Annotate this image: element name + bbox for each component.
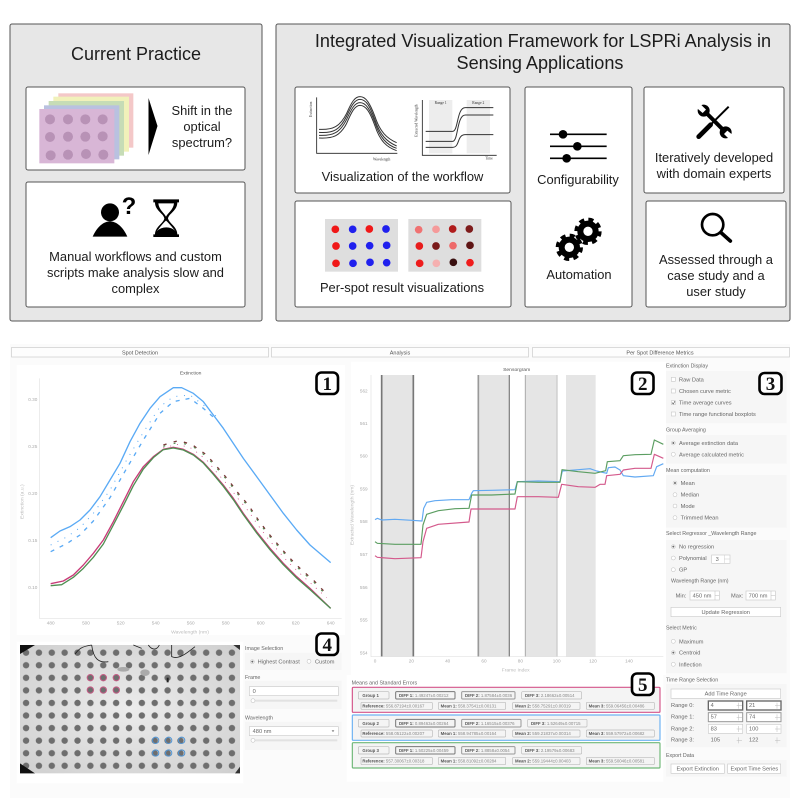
controls: regression range, metric, time ranges, export: 4 [711, 703, 714, 709]
controls: regression range, metric, time ranges, export: 105 [711, 738, 720, 744]
text: iteratively developed: with domain experts [656, 166, 771, 181]
controls: regression range, metric, time ranges, export: 700 nm [749, 593, 768, 599]
controls: image selection: 0 [253, 689, 256, 695]
text: shift question: Shift in the [172, 103, 232, 118]
controls: display options: Average calculated metric [679, 452, 744, 458]
text: iteratively developed: Iteratively developed [655, 150, 773, 165]
chart: sensorgram: 80 [518, 659, 523, 664]
chart: extinction curves: 0.25 [28, 444, 38, 449]
controls: display options: Raw Data [679, 378, 705, 384]
controls: image selection: Custom [315, 659, 335, 665]
group 1: DIFF 3: 2.18662±0.00514 [525, 693, 575, 698]
chart: sensorgram sketch: Time [485, 156, 493, 160]
group 1: DIFF 1: 1.49247±0.00212 [399, 693, 449, 698]
tab bar: Analysis [390, 350, 410, 356]
badge: 1 [316, 372, 338, 395]
controls: regression range, metric, time ranges, export: 100 [749, 726, 758, 732]
badge: 3: 3 [766, 374, 775, 395]
controls: display options: Select Regressor _Wavelength Range [666, 531, 756, 537]
chart: extinction curves: 0.10 [28, 585, 38, 590]
chart: sensorgram: 20 [409, 659, 414, 664]
chart: sensorgram: Sensorgram [503, 367, 530, 373]
group 1 [352, 687, 660, 712]
group 1: Mean 1: 558.37541±0.00131 [441, 703, 497, 708]
icon: hourglass [153, 199, 179, 237]
icon: stacked image sheets [39, 93, 133, 163]
controls: regression range, metric, time ranges, export: Range 2: [671, 726, 694, 732]
controls: regression range, metric, time ranges, export: 450 nm [693, 593, 712, 599]
card: assessed through studies [646, 201, 786, 307]
controls: display options: Average extinction data [679, 441, 739, 447]
controls: regression range, metric, time ranges, export: 74 [749, 715, 755, 721]
controls: regression range, metric, time ranges, export: Export Extinction [676, 767, 719, 773]
text: assessed: case study and a [667, 268, 766, 283]
chart: extinction curves: 560 [187, 620, 195, 625]
controls: regression range, metric, time ranges, export: Export Time Series [730, 767, 778, 773]
card: configurability and automation [525, 87, 632, 307]
chart: sensorgram: 555 [360, 618, 368, 623]
group 2: Reference: 558.05122±0.00207 [362, 731, 425, 736]
chart: sensorgram: 561 [360, 421, 368, 426]
icon: confused person: ? [122, 193, 136, 220]
chart: sensorgram: 60 [481, 659, 487, 664]
icon: wrench and screwdriver [696, 103, 734, 141]
controls: regression range, metric, time ranges, export: Time Range Selection [666, 678, 718, 684]
group 1: Reference: 556.87194±0.00167 [362, 703, 425, 708]
chart: sensorgram: 560 [360, 454, 368, 459]
panel: integrated visualization framework [276, 24, 790, 321]
group 1: Group 1 [362, 693, 380, 698]
controls: display options: GP [679, 568, 687, 574]
group 3: Group 3 [362, 748, 380, 753]
icon: confused person [93, 193, 136, 237]
controls: regression range, metric, time ranges, export: Export Data [666, 753, 694, 759]
controls: regression range, metric, time ranges, export: Range 3: [671, 738, 694, 744]
controls: display options: Time average curves [679, 401, 732, 407]
group 3: Mean 1: 558.81092±0.00284 [441, 759, 497, 764]
chart: extinction curves: 620 [292, 620, 300, 625]
chart: extinction sketch: Extinction [309, 102, 313, 117]
panel: current practice [10, 24, 262, 321]
chart: extinction sketch [309, 97, 397, 161]
controls: image selection: Highest Contrast [258, 659, 300, 665]
card: iteratively developed [644, 87, 784, 193]
badge: 2: 2 [638, 374, 648, 395]
chart: extinction curves: 520 [117, 620, 125, 625]
text: manual workflows: Manual workflows and custom [49, 249, 222, 264]
tab bar [12, 348, 790, 357]
chart: sensorgram sketch [415, 100, 497, 160]
controls: regression range, metric, time ranges, export: Inflection [679, 662, 702, 668]
chart: extinction curves: 540 [152, 620, 160, 625]
controls: regression range, metric, time ranges, export: Range 0: [671, 703, 694, 709]
chart: extinction curves: 0.30 [28, 397, 38, 402]
chart: extinction curves: Extinction [180, 370, 202, 376]
chart: extinction curves: 640 [327, 620, 335, 625]
controls: regression range, metric, time ranges, export: Wavelength Range (nm) [671, 579, 729, 585]
controls: image selection: 480 nm [253, 729, 272, 735]
panel: means and standard errors [347, 675, 663, 782]
controls: display options: Median [681, 493, 699, 499]
heading: current practice: Current Practice [71, 44, 201, 64]
group 2: DIFF 3: 1.52649±0.00715 [531, 721, 581, 726]
text: manual workflows: complex [112, 281, 160, 296]
text: manual workflows: scripts make analysis slow and [47, 265, 224, 280]
tab bar: Spot Detection [122, 350, 158, 356]
chart: extinction curves: 580 [222, 620, 230, 625]
text: automation: Automation [546, 267, 612, 282]
group 3: Reference: 557.30067±0.00318 [362, 759, 425, 764]
icon: gears [558, 220, 600, 259]
heading: framework title: Integrated Visualization Framework for LSPRi Analysis in [315, 31, 771, 51]
chart: extinction sketch: Wavelength [373, 157, 391, 161]
controls: display options: Time range functional boxplots [679, 412, 756, 418]
chart: sensorgram: 100 [553, 659, 561, 664]
chart: extinction curves: 0.15 [28, 538, 38, 543]
controls: regression range, metric, time ranges, export: Range 1: [671, 715, 694, 721]
chart: extinction curves: 0.20 [28, 491, 38, 496]
group 2 [352, 715, 660, 740]
badge: 4: 4 [323, 635, 333, 656]
controls: regression range, metric, time ranges, export: Add Time Range [705, 692, 747, 698]
chart: extinction curves: Wavelength (nm) [171, 629, 209, 635]
arrow: to question [148, 98, 158, 155]
controls: display options: Polynomial [679, 556, 707, 562]
chart: sensorgram: Frame Index [502, 667, 530, 673]
card: visualization of the workflow [295, 87, 510, 193]
card: optical spectrum question [26, 87, 245, 170]
chart: sensorgram sketch: Range 1 [435, 101, 447, 105]
controls: display options: Trimmed Mean [681, 516, 718, 522]
chart: difference spot map [408, 219, 481, 272]
controls: regression range, metric, time ranges, export: Select Metric [666, 625, 697, 631]
controls: display options: Mode [681, 504, 695, 510]
chart: sensorgram: 0 [374, 659, 377, 664]
chart: extinction curves [17, 365, 345, 635]
controls: image selection [245, 646, 342, 750]
controls: display options: Mean [681, 481, 695, 487]
chart: sensorgram: Extracted Wavelength (nm) [349, 485, 355, 545]
controls: regression range, metric, time ranges, export: 21 [749, 703, 755, 709]
chart: sensorgram [349, 362, 666, 675]
controls: regression range, metric, time ranges, export: 122 [749, 738, 758, 744]
chart: sensorgram: 140 [625, 659, 633, 664]
controls: display options [666, 364, 787, 637]
controls: regression range, metric, time ranges, export: Centroid [679, 651, 700, 657]
heading: framework title: Sensing Applications [457, 53, 623, 73]
group 3: Mean 2: 559.19444±0.00403 [515, 759, 571, 764]
text: visualization caption: Visualization of the workflow [322, 169, 484, 184]
card: manual workflows [26, 182, 245, 307]
chart: sensorgram sketch: Extracted Wavelength [415, 104, 419, 137]
group 3: DIFF 2: 1.8858±0.0054 [465, 748, 510, 753]
text: shift question: spectrum? [172, 135, 232, 150]
controls: regression range, metric, time ranges, export: Max: [731, 593, 744, 599]
group 2: DIFF 2: 1.16515±0.00376 [465, 721, 515, 726]
chart: extinction curves: Extinction (a.u.) [19, 484, 25, 519]
chart: sensorgram: 559 [360, 486, 368, 491]
chart: sensorgram: 557 [360, 552, 368, 557]
text: assessed: Assessed through a [659, 252, 774, 267]
group 2: Mean 3: 559.57972±0.00682 [589, 731, 645, 736]
icon: magnifier [702, 214, 730, 241]
controls: image selection: Frame [245, 675, 260, 681]
icon: sliders [550, 130, 607, 163]
controls: regression range, metric, time ranges, export: Min: [676, 593, 687, 599]
group 1: Mean 3: 559.06456±0.00486 [589, 703, 645, 708]
controls: display options: Chosen curve metric [679, 389, 731, 395]
controls: display options: Extinction Display [666, 364, 708, 370]
controls: display options: Group Averaging [666, 428, 706, 434]
badge: 4 [316, 634, 338, 656]
controls: regression range, metric, time ranges, export [666, 579, 787, 777]
text: assessed: user study [686, 284, 746, 299]
controls: image selection: Image Selection [245, 646, 283, 652]
group 2: Group 2 [362, 721, 380, 726]
chart: extinction curves: 600 [257, 620, 265, 625]
chart: sensorgram: 556 [360, 585, 368, 590]
controls: image selection: Wavelength [245, 715, 273, 721]
group 3: DIFF 1: 1.50225±0.00459 [399, 748, 449, 753]
badge: 3 [760, 373, 782, 395]
chart: sensorgram: 562 [360, 388, 368, 393]
text: configurability: Configurability [537, 172, 619, 187]
group 1: Mean 2: 558.75291±0.00319 [515, 703, 571, 708]
chart: sensorgram sketch: Range 2 [472, 101, 485, 105]
badge: 1: 1 [323, 374, 332, 395]
badge: 2 [632, 372, 654, 395]
chart: two-colour spot map [325, 219, 398, 272]
controls: regression range, metric, time ranges, export: Update Regression [701, 610, 750, 616]
card: per-spot results [295, 201, 511, 307]
panel: means and standard errors: Means and Standard Errors [352, 680, 417, 686]
controls: display options: 3 [716, 557, 719, 563]
panel: application screenshot [10, 344, 790, 798]
chart: sensorgram: 558 [360, 519, 368, 524]
text: shift question: optical [183, 119, 221, 134]
chart: extinction curves: 480 [47, 620, 55, 625]
badge: 5 [632, 674, 654, 696]
controls: display options: No regression [679, 545, 714, 551]
controls: regression range, metric, time ranges, export: 57 [711, 715, 717, 721]
group 3 [352, 743, 660, 768]
controls: regression range, metric, time ranges, export: Maximum [679, 639, 704, 645]
controls: display options: Mean computation [666, 468, 710, 474]
tab bar: Per Spot Difference Metrics [626, 350, 694, 356]
chart: extinction curves: 500 [82, 620, 90, 625]
chart: sensorgram: 120 [589, 659, 597, 664]
chart: sensorgram: 40 [445, 659, 451, 664]
image: spot array [17, 642, 243, 783]
group 2: DIFF 1: 0.89463±0.00264 [399, 721, 449, 726]
group 3: DIFF 3: 2.19579±0.00683 [525, 748, 575, 753]
group 3: Mean 3: 559.50046±0.00581 [589, 759, 645, 764]
chart: sensorgram: 554 [360, 650, 368, 655]
badge: 5: 5 [638, 675, 648, 696]
group 2: Mean 1: 558.94785±0.00164 [441, 731, 497, 736]
group 1: DIFF 2: 1.87584±0.0036 [465, 693, 513, 698]
text: per-spot caption: Per-spot result visualizations [320, 280, 484, 295]
controls: regression range, metric, time ranges, export: 83 [711, 726, 717, 732]
group 2: Mean 2: 559.21837±0.00314 [515, 731, 571, 736]
